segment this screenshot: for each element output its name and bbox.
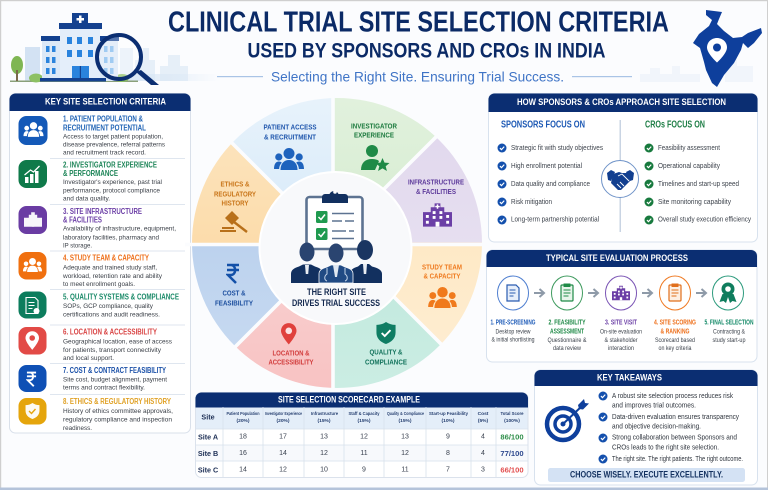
- criterion 6: Geographical location, ease of access: [63, 338, 173, 346]
- segment: investigator experience: [351, 122, 397, 171]
- row: Site A: 18: [239, 434, 247, 440]
- criterion 3: 3. SITE INFRASTRUCTURE: [63, 207, 143, 216]
- illustration: hospital with magnifier and skyline: [10, 13, 220, 85]
- takeaways list: [598, 392, 743, 464]
- segment: ethics and regulatory history: HISTORY: [222, 198, 248, 208]
- table column headers: (20%): [236, 418, 250, 424]
- segment: study team and capacity: [422, 262, 462, 308]
- segment: quality and compliance: [365, 322, 407, 366]
- panel heading: [10, 94, 190, 111]
- segment: investigator experience: EXPERIENCE: [354, 130, 394, 140]
- criterion 7: [18, 365, 167, 392]
- panel heading: [486, 250, 757, 267]
- step 1: Desktop review: [496, 328, 531, 336]
- panel heading: TYPICAL SITE EVALUATION PROCESS: [546, 253, 688, 264]
- sponsors column: [498, 120, 604, 224]
- criterion 6: for patients, transport connectivity: [63, 347, 162, 354]
- table column headers: Staff & Capacity: [348, 411, 380, 417]
- table column headers: Total Score: [500, 411, 524, 417]
- step 4: on key criteria: [658, 345, 692, 352]
- segment: ethics and regulatory history: [214, 180, 256, 232]
- row: Site C: 12: [279, 466, 287, 474]
- row: Site A: Site A: [198, 432, 218, 442]
- segment: patient access: PATIENT ACCESS: [264, 122, 316, 132]
- criterion 1: RECRUITMENT POTENTIAL: [63, 124, 146, 132]
- row: Site B: 77/100: [500, 449, 524, 458]
- table column headers: Cost: [478, 411, 489, 417]
- criterion 2: & PERFORMANCE: [63, 169, 119, 178]
- panel: typical site evaluation process: [486, 250, 757, 362]
- segment: location and accessibility: [268, 323, 314, 366]
- CROs column: Feasibility assessment: [658, 145, 720, 152]
- criterion 1: Access to target patient population,: [63, 134, 163, 140]
- table column headers: (15%): [317, 418, 331, 424]
- row: Site A: 86/100: [500, 432, 524, 442]
- callout banner: CHOOSE WISELY. EXECUTE EXCELLENTLY.: [570, 470, 723, 480]
- panel heading: [534, 370, 758, 386]
- icon: central clipboard with team: THE RIGHT SITE: [307, 287, 366, 297]
- table column headers: Quality & Compliance: [387, 411, 424, 417]
- step 4: Scorecard based: [655, 337, 695, 344]
- table column headers: (15%): [398, 418, 412, 424]
- icon: central clipboard with team: [291, 190, 382, 308]
- table column headers: Infrastructure: [311, 411, 338, 417]
- step 3: 3. SITE VISIT: [605, 320, 638, 326]
- step 3: interaction: [608, 345, 634, 352]
- row: Site A: 4: [481, 434, 485, 440]
- takeaways list: Data-driven evaluation ensures transparency: [612, 414, 740, 421]
- icon: target with arrow: [547, 399, 589, 440]
- table column headers: (100%): [504, 418, 520, 424]
- step 1: 1. PRE-SCREENING: [490, 320, 536, 326]
- step 2: data review: [553, 345, 581, 352]
- criterion 8: [18, 397, 173, 432]
- criterion 2: 2. INVESTIGATOR EXPERIENCE: [63, 160, 158, 170]
- step 2: ASSESSMENT: [550, 328, 585, 336]
- criterion 2: and data quality.: [63, 196, 110, 202]
- segment: quality and compliance: QUALITY &: [370, 348, 403, 356]
- row: Site C: Site C: [198, 466, 218, 474]
- row: Site C: 14: [239, 466, 247, 474]
- table column headers: Site: [201, 412, 215, 422]
- criterion 1: [18, 114, 166, 156]
- table column headers: (15%): [357, 418, 371, 424]
- CROs column: CROs FOCUS ON: [645, 120, 705, 130]
- row: Site A: [198, 432, 524, 442]
- takeaways list: Strong collaboration between Sponsors and: [612, 434, 737, 442]
- step 4: 4. SITE SCORING: [654, 320, 696, 326]
- icon: central clipboard with team: DRIVES TRIAL SUCCESS: [292, 298, 380, 308]
- sponsors column: High enrollment potential: [511, 163, 582, 170]
- panel heading: KEY SITE SELECTION CRITERIA: [45, 96, 166, 108]
- criterion 5: [18, 292, 180, 318]
- row: Site C: 3: [481, 466, 485, 474]
- row: Site A: 13: [401, 434, 409, 440]
- panel heading: HOW SPONSORS & CROs APPROACH SITE SELECTION: [517, 97, 726, 108]
- criterion 1: disease prevalence, referral patterns: [63, 142, 166, 148]
- row: Site A: 13: [320, 434, 328, 440]
- table column headers: Start-up Feasibility: [429, 411, 468, 417]
- takeaways list: and objective decision-making.: [612, 424, 701, 430]
- step 2: [548, 276, 587, 352]
- panel: how sponsors and CROs approach site selection: [488, 94, 758, 242]
- criterion 3: IP storage.: [63, 242, 92, 250]
- step 3: [600, 276, 642, 352]
- arrow: [642, 289, 652, 297]
- criterion 8: 8. ETHICS & REGULATORY HISTORY: [63, 397, 172, 406]
- criterion 5: SOPs, GCP compliance, quality: [63, 303, 154, 310]
- arrow: [696, 289, 706, 297]
- criterion 3: [18, 206, 176, 250]
- table column headers: (20%): [276, 418, 290, 424]
- criterion 5: certifications and audit readiness.: [63, 312, 160, 318]
- chart: criteria wheel: [190, 98, 482, 388]
- criterion 3: laboratory facilities, pharmacy and: [63, 234, 159, 242]
- criterion 8: readiness.: [63, 425, 92, 432]
- criterion 1: 1. PATIENT POPULATION &: [63, 114, 143, 124]
- takeaways list: The right site. The right patients. The right outcome.: [612, 456, 743, 463]
- row: Site A: 12: [360, 434, 368, 440]
- step 4: & RANKING: [660, 328, 690, 336]
- criterion 4: Adequate and trained study staff,: [63, 264, 157, 272]
- criterion 3: Availability of infrastructure, equipment,: [63, 226, 176, 232]
- sponsors column: Long-term partnership potential: [511, 216, 599, 224]
- panel heading: [488, 94, 758, 112]
- step 1: [490, 276, 536, 344]
- step 5: [704, 276, 754, 344]
- panel: key site selection criteria: [10, 94, 190, 433]
- table heading: SITE SELECTION SCORECARD EXAMPLE: [278, 394, 420, 406]
- segment: ethics and regulatory history: REGULATORY: [214, 190, 256, 198]
- takeaways list: A robust site selection process reduces risk: [612, 393, 733, 400]
- criterion 7: Site cost, budget alignment, payment: [63, 376, 167, 384]
- segment: patient access: [264, 122, 316, 170]
- row: Site C: 66/100: [500, 466, 524, 474]
- table heading: [196, 392, 528, 408]
- CROs column: Overall study execution efficiency: [658, 216, 751, 224]
- criterion 6: 6. LOCATION & ACCESSIBILITY: [63, 328, 158, 336]
- row: Site B: [198, 449, 524, 458]
- row: Site B: 11: [360, 450, 368, 457]
- segment: ethics and regulatory history: ETHICS &: [220, 180, 250, 188]
- criterion 2: [18, 160, 162, 202]
- criterion 4: 4. STUDY TEAM & CAPACITY: [63, 254, 150, 262]
- callout banner: [548, 468, 745, 482]
- step 5: study start-up: [712, 337, 746, 344]
- criterion 3: & FACILITIES: [63, 216, 102, 224]
- sponsors column: Risk mitigation: [511, 199, 552, 206]
- segment: infrastructure and facilities: & FACILITIES: [416, 187, 456, 196]
- row: Site B: Site B: [198, 449, 218, 458]
- CROs column: Site monitoring capability: [658, 199, 732, 206]
- criterion 1: and recruitment track record.: [63, 150, 146, 156]
- criterion 2: performance, protocol compliance: [63, 188, 160, 194]
- panel heading: KEY TAKEAWAYS: [597, 372, 662, 384]
- row: Site C: 9: [362, 466, 366, 474]
- row: Site B: 8: [446, 450, 450, 457]
- table column headers: Patient Population: [226, 411, 260, 417]
- criterion 4: [18, 252, 163, 288]
- segment: study team and capacity: & CAPACITY: [424, 272, 460, 280]
- row: Site C: 11: [401, 466, 409, 474]
- criterion 4: to meet enrollment goals.: [63, 281, 135, 288]
- segment: patient access: & RECRUITMENT: [264, 132, 316, 142]
- segment: cost and feasibility: [215, 265, 253, 308]
- CROs column: [644, 120, 751, 224]
- sponsors column: Data quality and compliance: [511, 181, 590, 188]
- row: Site C: 7: [446, 466, 450, 474]
- segment: infrastructure and facilities: [408, 178, 464, 227]
- segment: location and accessibility: ACCESSIBILITY: [268, 358, 314, 366]
- row: Site C: [198, 466, 524, 474]
- subtitle: USED BY SPONSORS AND CROs IN INDIA: [248, 40, 606, 62]
- row: Site A: 9: [446, 434, 450, 440]
- CROs column: Timelines and start-up speed: [658, 181, 739, 188]
- segment: quality and compliance: COMPLIANCE: [365, 358, 407, 366]
- step 3: On-site evaluation: [600, 328, 642, 336]
- criterion 2: Investigator's experience, past trial: [63, 179, 162, 186]
- criterion 8: History of ethics committee approvals,: [63, 408, 173, 415]
- row: Site A: 17: [279, 434, 287, 440]
- sponsors column: SPONSORS FOCUS ON: [501, 120, 585, 130]
- step 4: [654, 276, 696, 352]
- arrow: [588, 289, 598, 297]
- table column headers: (10%): [441, 418, 455, 424]
- table column headers: Investigator Experience: [265, 411, 302, 417]
- panel: key takeaways: [534, 370, 758, 485]
- row: Site B: 12: [401, 450, 409, 457]
- step 3: & stakeholder: [604, 337, 638, 344]
- segment: investigator experience: INVESTIGATOR: [351, 122, 397, 130]
- tagline: Selecting the Right Site. Ensuring Trial Success.: [271, 68, 564, 84]
- step 2: 2. FEASIBILITY: [548, 320, 586, 326]
- step 1: & initial shortlisting: [492, 336, 535, 344]
- criterion 8: regulatory compliance and inspection: [63, 416, 172, 424]
- takeaways list: and improves trial outcomes.: [612, 402, 696, 410]
- icon: India map with pin: [640, 10, 762, 87]
- criterion 6: [18, 327, 173, 362]
- table column headers: (5%): [478, 418, 489, 424]
- step 2: Questionnaire &: [548, 337, 587, 344]
- segment: cost and feasibility: COST &: [222, 288, 246, 298]
- table column headers: [201, 411, 524, 424]
- criterion 6: and local support.: [63, 355, 114, 362]
- segment: study team and capacity: STUDY TEAM: [422, 262, 462, 272]
- takeaways list: CROs leads to the right site selection.: [612, 444, 719, 452]
- icon: handshake: [602, 160, 638, 198]
- row: Site B: 16: [239, 450, 247, 457]
- criterion 7: 7. COST & CONTRACT FEASIBILITY: [63, 366, 166, 375]
- step 5: Contracting &: [713, 328, 746, 336]
- row: Site C: 10: [320, 466, 328, 474]
- row: Site B: 4: [481, 450, 485, 457]
- row: Site B: 12: [320, 450, 328, 457]
- CROs column: Operational capability: [658, 163, 721, 170]
- criterion 4: workload, retention rate and ability: [62, 273, 163, 280]
- sponsors column: Strategic fit with study objectives: [511, 145, 604, 152]
- criterion 7: terms and contract flexibility.: [63, 384, 145, 392]
- arrow: [534, 289, 544, 297]
- segment: infrastructure and facilities: INFRASTRUCTURE: [408, 178, 464, 186]
- row: Site B: 14: [279, 450, 287, 457]
- segment: cost and feasibility: FEASIBILITY: [215, 298, 253, 308]
- criterion 5: 5. QUALITY SYSTEMS & COMPLIANCE: [63, 292, 180, 302]
- segment: location and accessibility: LOCATION &: [272, 348, 310, 358]
- panel: scorecard table: [196, 392, 528, 478]
